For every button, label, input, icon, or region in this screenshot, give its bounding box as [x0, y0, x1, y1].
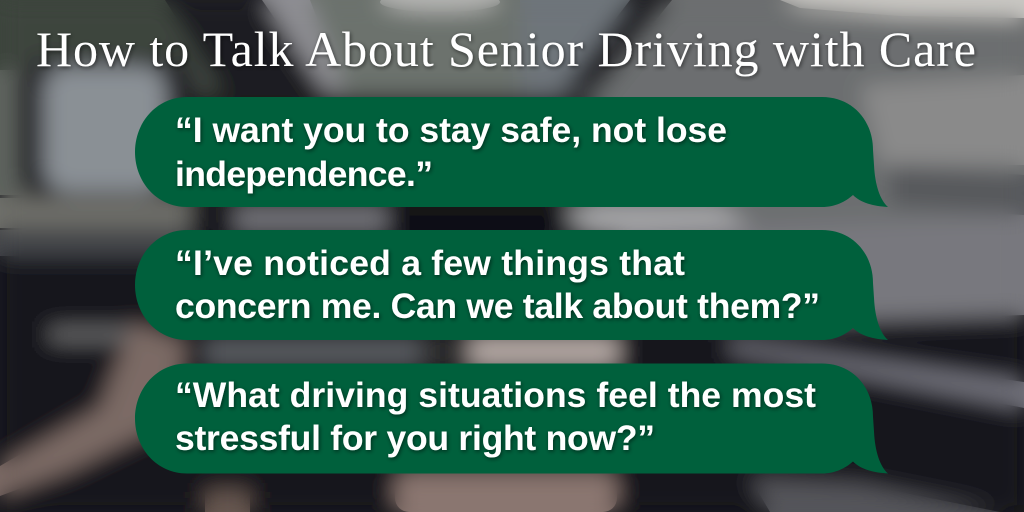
- title: How to Talk About Senior Driving with Care: [36, 21, 976, 77]
- speech bubble: stay safe: [135, 97, 888, 207]
- speech bubble: stay safe: “I want you to stay safe, not lose: [175, 110, 727, 150]
- speech bubble: noticed concerns: concern me. Can we talk about them?”: [175, 286, 820, 326]
- speech bubble: stressful situations: [135, 364, 888, 474]
- speech bubble: noticed concerns: [135, 230, 888, 340]
- speech bubble: stressful situations: stressful for you right now?”: [175, 418, 655, 458]
- speech bubble: stay safe: independence.”: [175, 154, 433, 194]
- speech bubble: stressful situations: “What driving situations feel the most: [175, 375, 816, 415]
- speech bubble: noticed concerns: “I’ve noticed a few things that: [175, 243, 685, 283]
